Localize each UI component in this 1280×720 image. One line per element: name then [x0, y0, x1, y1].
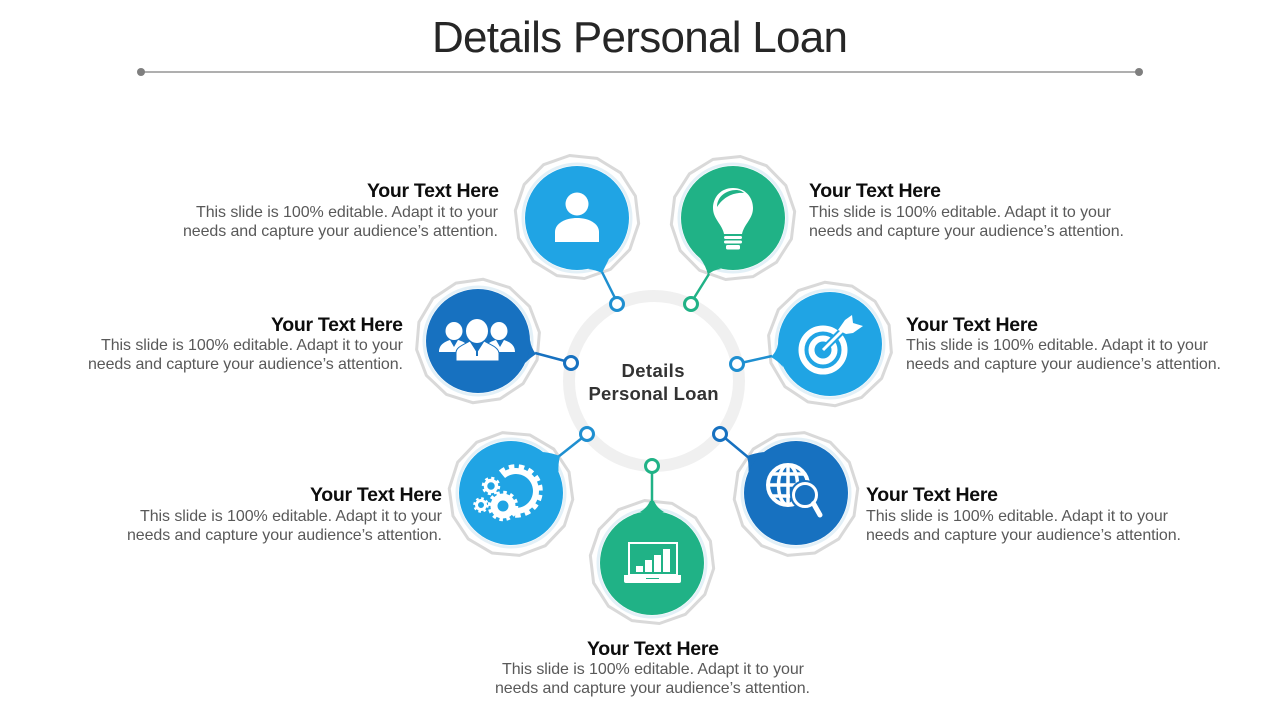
text: person: needs and capture your audience’s attention. [183, 223, 498, 240]
text: person: This slide is 100% editable. Adapt it to your [196, 204, 499, 221]
text: team: Your Text Here [271, 314, 403, 336]
text: gears: Your Text Here [310, 484, 442, 506]
icon: light bulb [713, 188, 753, 250]
icon: person [555, 192, 599, 242]
text: idea [809, 180, 1124, 240]
center label [588, 360, 718, 404]
text: person [183, 180, 499, 240]
text: laptop: Your Text Here [587, 638, 719, 660]
text: laptop: This slide is 100% editable. Adapt it to your [502, 661, 805, 678]
panel: globe [714, 428, 863, 560]
text: target: This slide is 100% editable. Adapt it to your [906, 337, 1209, 354]
text: team: needs and capture your audience’s attention. [88, 356, 403, 373]
text: target [906, 314, 1221, 373]
text: laptop: needs and capture your audience’s attention. [495, 680, 810, 697]
panel: gears [444, 428, 594, 560]
text: idea: Your Text Here [809, 180, 941, 202]
icon: laptop chart [624, 543, 681, 583]
panel: idea [665, 151, 801, 310]
center ring [569, 296, 739, 466]
title: Details Personal Loan [432, 13, 848, 62]
icon: gears [474, 466, 541, 520]
icon: globe search [767, 464, 820, 515]
center label: Details [622, 360, 684, 381]
text: globe: This slide is 100% editable. Adapt it to your [866, 508, 1169, 525]
text: idea: needs and capture your audience’s attention. [809, 223, 1124, 240]
text: target: needs and capture your audience’s attention. [906, 356, 1221, 373]
panel: target [730, 276, 900, 412]
panel: laptop [584, 460, 720, 629]
text: gears: needs and capture your audience’s attention. [127, 527, 442, 544]
text: team: This slide is 100% editable. Adapt it to your [101, 337, 404, 354]
text: gears [127, 484, 443, 544]
panel: person [509, 150, 645, 310]
text: gears: This slide is 100% editable. Adapt it to your [140, 508, 443, 525]
icon: target [802, 315, 863, 372]
text: globe: Your Text Here [866, 484, 998, 506]
text: laptop [495, 638, 810, 697]
center label: Personal Loan [588, 383, 718, 404]
text: target: Your Text Here [906, 314, 1038, 336]
text: person: Your Text Here [367, 180, 499, 202]
icon: team [439, 319, 515, 361]
text: globe [866, 484, 1181, 544]
panel: team [408, 273, 578, 409]
text: globe: needs and capture your audience’s attention. [866, 527, 1181, 544]
title rule [137, 68, 1143, 76]
text: team [88, 314, 404, 373]
text: idea: This slide is 100% editable. Adapt it to your [809, 204, 1112, 221]
